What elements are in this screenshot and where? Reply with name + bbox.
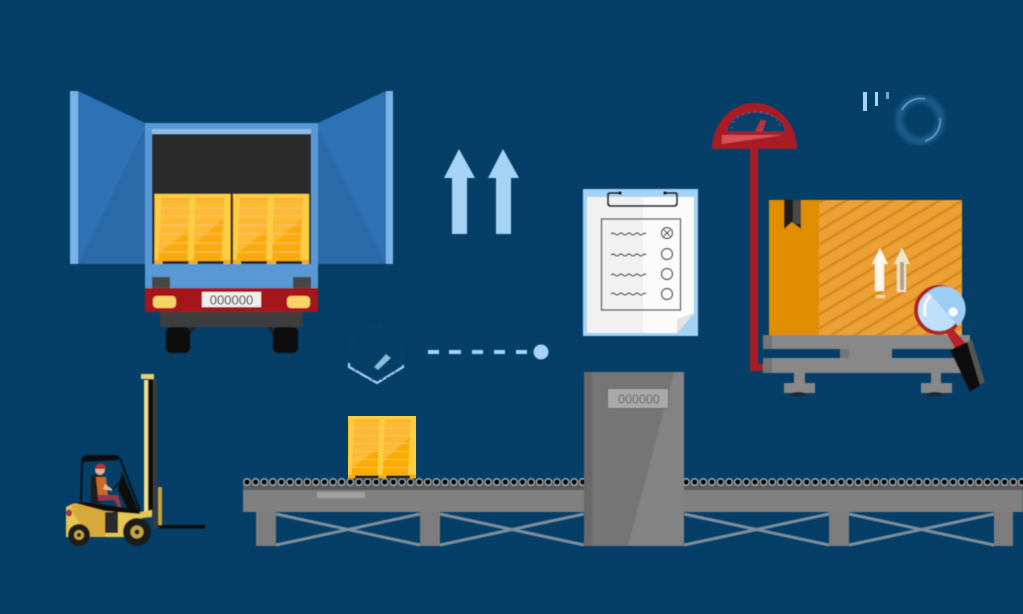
machine display	[607, 388, 669, 409]
truck	[70, 91, 393, 353]
platform scale	[712, 103, 985, 396]
box arrows	[872, 248, 910, 298]
scale pole	[750, 149, 763, 371]
licence plate: 000000	[210, 292, 253, 308]
forklift mast	[141, 374, 157, 528]
scanner machine	[584, 372, 684, 546]
left truck wheel	[166, 327, 197, 353]
forklift front wheel	[123, 518, 151, 546]
arrow two	[488, 149, 519, 234]
parcel box	[768, 199, 963, 336]
forklift driver	[91, 464, 122, 509]
up arrows	[444, 149, 519, 234]
clipboard clip	[608, 191, 677, 206]
forklift	[66, 374, 205, 546]
crate on conveyor	[348, 416, 416, 478]
conveyor cross braces	[276, 514, 994, 545]
conveyor legs	[256, 512, 1013, 546]
truck axle	[160, 312, 303, 327]
magnifying glass	[916, 286, 985, 392]
machine display: 000000	[618, 392, 660, 406]
left crate in truck	[154, 194, 230, 264]
scale platform	[763, 335, 970, 396]
clipboard	[583, 189, 698, 336]
dashed progress line	[428, 344, 548, 360]
forklift carriage and fork	[158, 487, 205, 528]
conveyor belt	[243, 482, 1023, 546]
conveyor rollers	[247, 478, 1023, 486]
left headlight	[153, 296, 176, 308]
arrow one	[444, 149, 475, 234]
right truck wheel	[266, 327, 298, 353]
truck bumper	[145, 288, 318, 312]
scale dial	[712, 103, 797, 149]
right truck door	[318, 91, 393, 264]
right headlight	[287, 296, 310, 308]
conveyor table	[243, 488, 1023, 512]
faded hexagon icon	[349, 326, 403, 383]
conveyor label plate	[317, 492, 365, 498]
right crate in truck	[233, 194, 309, 264]
box ribbon	[784, 200, 801, 229]
left truck door	[70, 91, 145, 264]
forklift body	[66, 502, 152, 537]
truck body	[145, 123, 318, 289]
faded ticks and ring icon	[863, 92, 941, 141]
checklist	[602, 219, 680, 310]
forklift rear wheel	[68, 524, 90, 546]
forklift cab frame	[81, 455, 140, 510]
